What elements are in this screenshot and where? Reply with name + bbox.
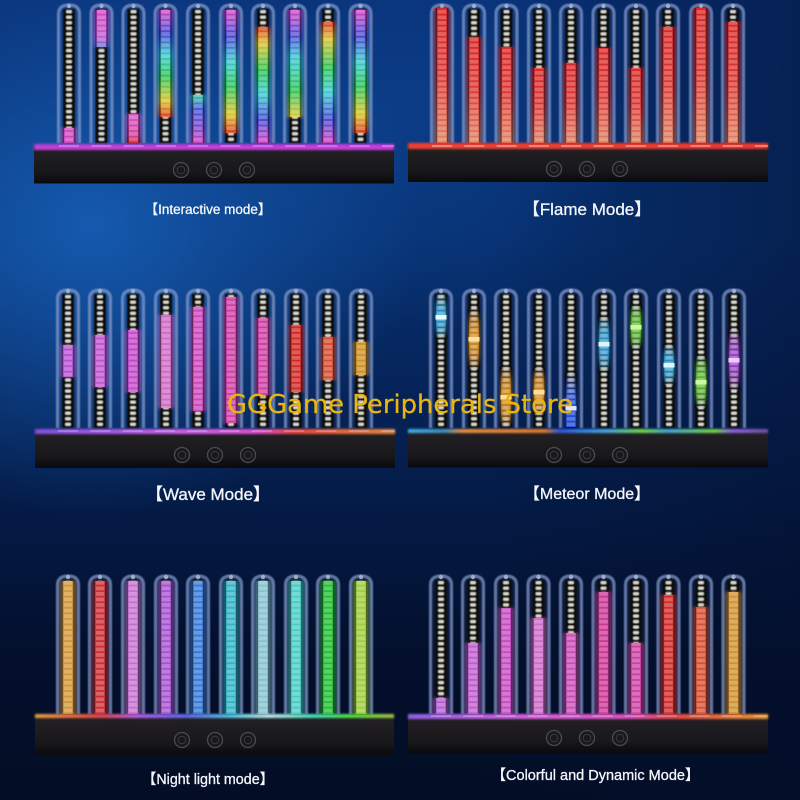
panel: meteor mode — [408, 289, 768, 503]
tube 10 — [350, 4, 371, 143]
tube 1 — [58, 4, 80, 143]
tube 7 — [626, 4, 646, 143]
tube 4 — [156, 289, 176, 428]
tube 4 — [528, 575, 549, 714]
tube 7 — [252, 575, 274, 714]
base: colorful and dynamic mode — [408, 714, 768, 753]
tube 3 — [122, 575, 144, 714]
tube 5 — [188, 575, 208, 714]
tube 1 — [58, 575, 78, 714]
tube 4 — [155, 4, 176, 143]
tube 3 — [123, 4, 144, 143]
caption: 【Meteor Mode】 — [524, 486, 650, 503]
tube 3 — [496, 4, 517, 143]
tube 7 — [252, 289, 274, 428]
watermark: GGGame Peripherals Store — [227, 390, 573, 420]
base: interactive mode — [34, 144, 394, 184]
tube 10 — [722, 4, 744, 143]
buttons — [546, 448, 628, 462]
tube 9 — [690, 575, 712, 714]
caption: 【Colorful and Dynamic Mode】 — [492, 767, 699, 784]
tube 6 — [220, 575, 242, 714]
tube 4 — [528, 4, 550, 143]
tube 8 — [286, 289, 306, 428]
tube 1 — [432, 4, 452, 143]
tube 2 — [462, 575, 484, 714]
tubes: wave mode — [58, 289, 372, 428]
panel: colorful and dynamic mode — [408, 575, 768, 784]
base: night light mode — [35, 714, 394, 755]
tube 8 — [284, 4, 306, 143]
caption: 【Interactive mode】 — [145, 202, 271, 217]
buttons — [174, 448, 256, 462]
tube 9 — [690, 4, 712, 143]
buttons — [546, 162, 628, 176]
tube 5 — [560, 575, 582, 714]
tube 8 — [286, 575, 306, 714]
caption: 【Wave Mode】 — [146, 485, 270, 504]
buttons — [174, 732, 256, 748]
tube 3 — [122, 289, 144, 428]
tube 1 — [430, 575, 452, 714]
tube 9 — [318, 289, 338, 428]
tube 8 — [658, 4, 678, 143]
caption: 【Night light mode】 — [142, 771, 274, 788]
panel: flame mode — [408, 4, 768, 219]
tube 6 — [593, 4, 614, 143]
tube 6 — [593, 575, 614, 714]
tube 3 — [496, 289, 516, 428]
tube 10 — [350, 575, 372, 714]
tube 7 — [626, 289, 646, 428]
tube 9 — [318, 575, 338, 714]
tube 7 — [626, 575, 646, 714]
tube 2 — [91, 4, 112, 143]
panel: interactive mode — [34, 4, 394, 217]
tube 6 — [220, 4, 242, 143]
tube 10 — [723, 575, 744, 714]
tube 2 — [90, 575, 110, 714]
tube 5 — [560, 4, 582, 143]
tube 2 — [464, 4, 484, 143]
tubes: meteor mode — [430, 289, 744, 428]
tube 3 — [496, 575, 516, 714]
tube 10 — [724, 289, 744, 428]
tube 5 — [188, 289, 208, 428]
base: wave mode — [35, 429, 395, 468]
base: flame mode — [408, 143, 768, 182]
tube 7 — [252, 4, 274, 143]
tube 1 — [58, 289, 78, 428]
tube 6 — [220, 289, 242, 428]
base: meteor mode — [408, 429, 768, 468]
tube 4 — [528, 289, 550, 428]
tube 5 — [188, 4, 208, 143]
tubes: colorful and dynamic mode — [430, 575, 744, 714]
tube 4 — [156, 575, 176, 714]
tubes: flame mode — [432, 4, 744, 143]
tube 1 — [430, 289, 452, 428]
tube 5 — [560, 289, 582, 428]
tube 6 — [594, 289, 614, 428]
tube 2 — [90, 289, 110, 428]
panel: night light mode — [35, 575, 394, 788]
caption: 【Flame Mode】 — [523, 200, 651, 219]
panel: wave mode — [35, 289, 395, 504]
tube 10 — [350, 289, 372, 428]
buttons — [174, 162, 254, 178]
tube 9 — [690, 289, 712, 428]
tubes: night light mode — [58, 575, 372, 714]
tube 9 — [318, 4, 338, 143]
buttons — [546, 730, 628, 746]
tube 2 — [464, 289, 484, 428]
tubes: interactive mode — [58, 4, 371, 143]
tube 8 — [658, 575, 679, 714]
tube 8 — [658, 289, 680, 428]
